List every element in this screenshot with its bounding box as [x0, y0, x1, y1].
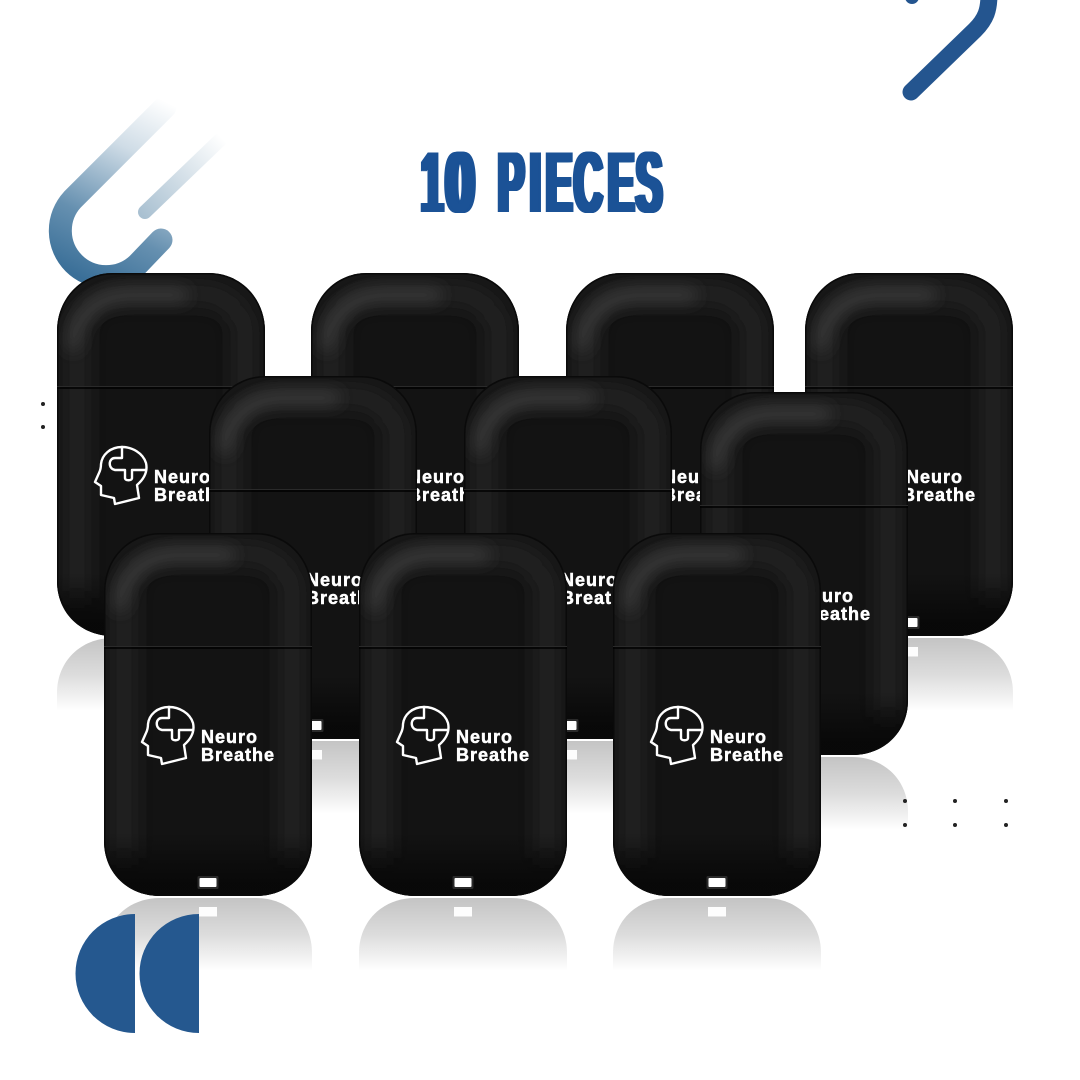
device: front row 2: Neuro — [456, 727, 512, 747]
device: middle row 2: Breathe — [561, 588, 634, 608]
device: back row 4: Breathe — [902, 485, 975, 505]
device: front row 1: Breathe — [201, 745, 274, 765]
device: front row 3: Breathe — [710, 745, 783, 765]
device: front row 1 — [104, 533, 312, 973]
decoration: blue hook top right — [905, 0, 989, 92]
device: back row 2: Neuro — [408, 467, 464, 487]
device: front row 2 — [359, 533, 567, 973]
device: back row 4 — [805, 273, 1013, 713]
decoration: dots left — [41, 402, 45, 429]
device: front row 1: Neuro — [201, 727, 257, 747]
device: back row 4: Neuro — [906, 467, 962, 487]
title: 0 — [446, 135, 474, 231]
decoration: dots right — [903, 799, 1008, 827]
title: 1 PIECES — [421, 135, 662, 231]
device: back row 3: Neuro — [663, 467, 719, 487]
device: back row 3: Breathe — [663, 485, 736, 505]
decoration: blue semicircles — [76, 914, 199, 1033]
device: back row 1 — [57, 273, 265, 713]
device: back row 2: Breathe — [408, 485, 481, 505]
device: front row 3: Neuro — [710, 727, 766, 747]
device: middle row 1: Breathe — [306, 588, 379, 608]
device: back row 1: Neuro — [154, 467, 210, 487]
device: middle row 2 — [464, 376, 672, 816]
device: middle row 3: Breathe — [797, 604, 870, 624]
decoration: faded blue hook top left — [60, 107, 222, 277]
device: middle row 2: Neuro — [561, 570, 617, 590]
device: front row 2: Breathe — [456, 745, 529, 765]
device: middle row 3: Neuro — [797, 586, 853, 606]
device: back row 1: Breathe — [154, 485, 227, 505]
device: middle row 1: Neuro — [306, 570, 362, 590]
device: middle row 1 — [209, 376, 417, 816]
device: front row 3 — [613, 533, 821, 973]
device: middle row 3 — [700, 392, 908, 832]
device: back row 2 — [311, 273, 519, 713]
device: back row 3 — [566, 273, 774, 713]
